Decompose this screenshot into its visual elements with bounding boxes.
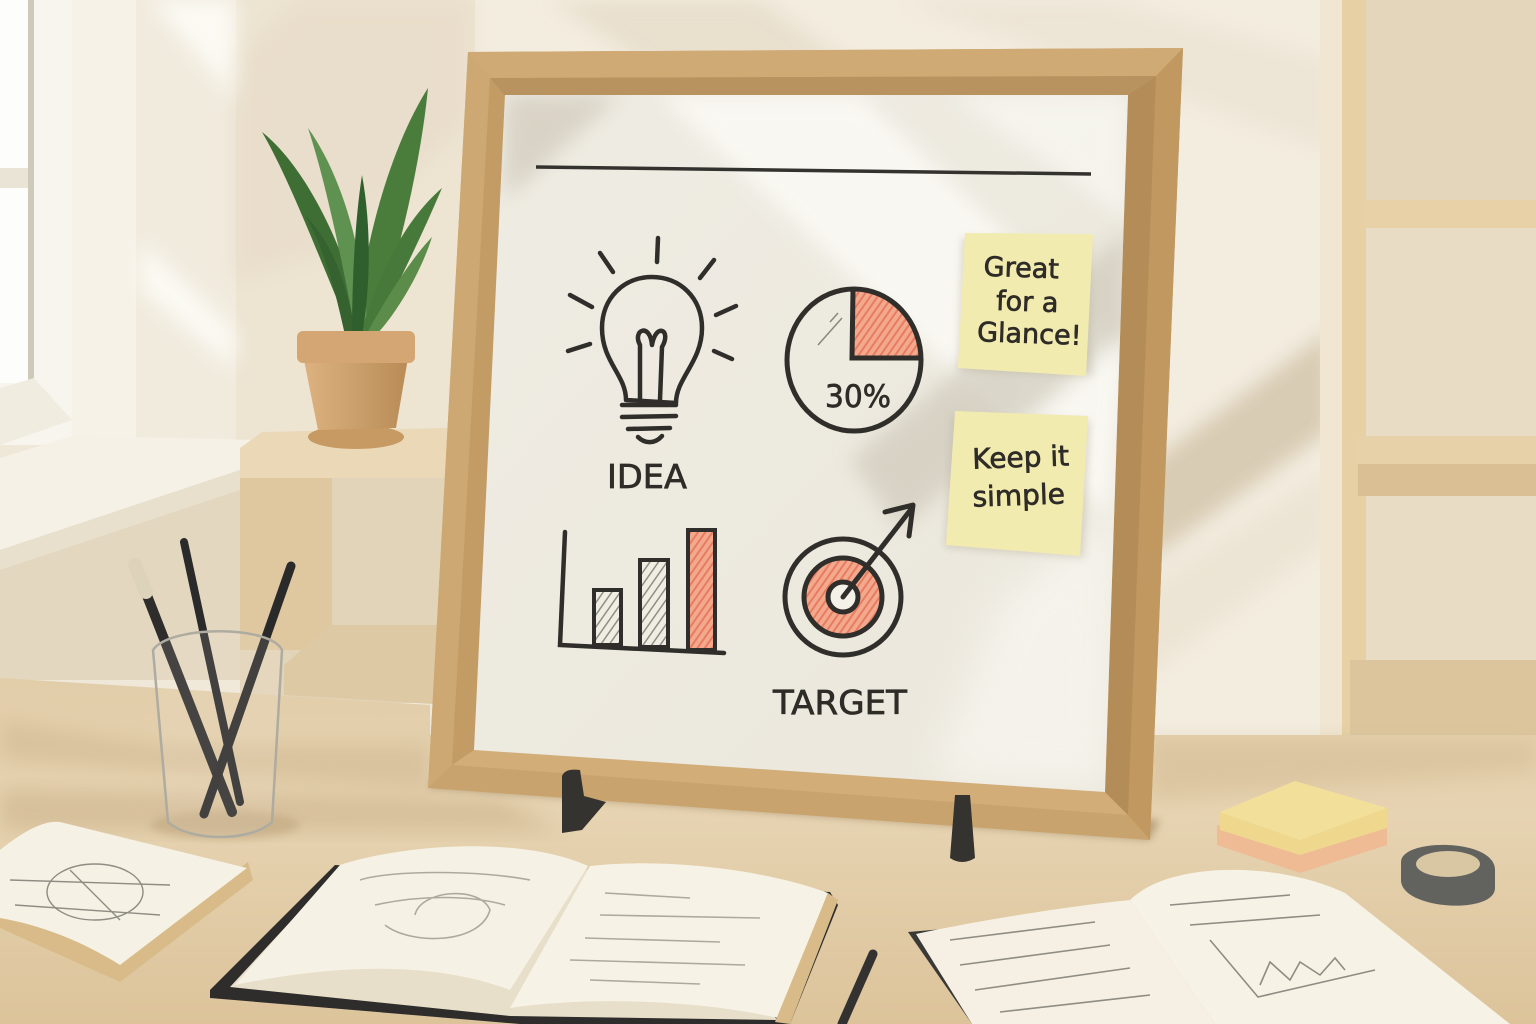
sticky note: keep it simple: Keep it — [972, 439, 1070, 476]
right bookcase — [1320, 0, 1536, 750]
label: target: TARGET — [772, 683, 908, 722]
room background wall — [0, 0, 1320, 735]
pencil glass — [135, 542, 300, 839]
pie label: 30% — [825, 379, 891, 415]
plant — [262, 88, 442, 449]
wooden frame — [428, 48, 1183, 840]
sticky note: keep it simple — [944, 411, 1090, 558]
easel stands — [562, 770, 975, 862]
target icon — [785, 505, 913, 655]
pencil on desk — [842, 954, 873, 1024]
open notebook centre — [210, 846, 838, 1024]
tape roll — [1401, 845, 1495, 906]
terracotta pot — [297, 331, 415, 449]
small notebook left — [0, 822, 253, 982]
bar chart — [560, 530, 724, 653]
wooden wall shelf — [240, 428, 450, 705]
plant leaves — [262, 88, 442, 335]
icon: light bulb — [568, 238, 736, 442]
glass — [153, 631, 282, 837]
sticky note: great for a glance: Great — [983, 252, 1059, 285]
label: idea: IDEA — [607, 457, 687, 496]
sticky note: great for a glance — [958, 233, 1093, 376]
heading line — [536, 167, 1091, 174]
white paper — [474, 95, 1128, 792]
desk — [0, 678, 1536, 1024]
sticky note: great for a glance: Glance! — [977, 317, 1082, 352]
board — [428, 48, 1183, 840]
window sill — [0, 436, 262, 680]
window — [0, 0, 72, 445]
pie chart 30% — [787, 289, 921, 431]
open notebook right — [908, 870, 1510, 1024]
sticky note: great for a glance: for a — [996, 286, 1059, 319]
sticky note: keep it simple: simple — [972, 477, 1065, 514]
sunlight on paper — [505, 95, 1128, 790]
pencils — [135, 542, 291, 814]
sticky note pad on desk — [1217, 781, 1387, 873]
